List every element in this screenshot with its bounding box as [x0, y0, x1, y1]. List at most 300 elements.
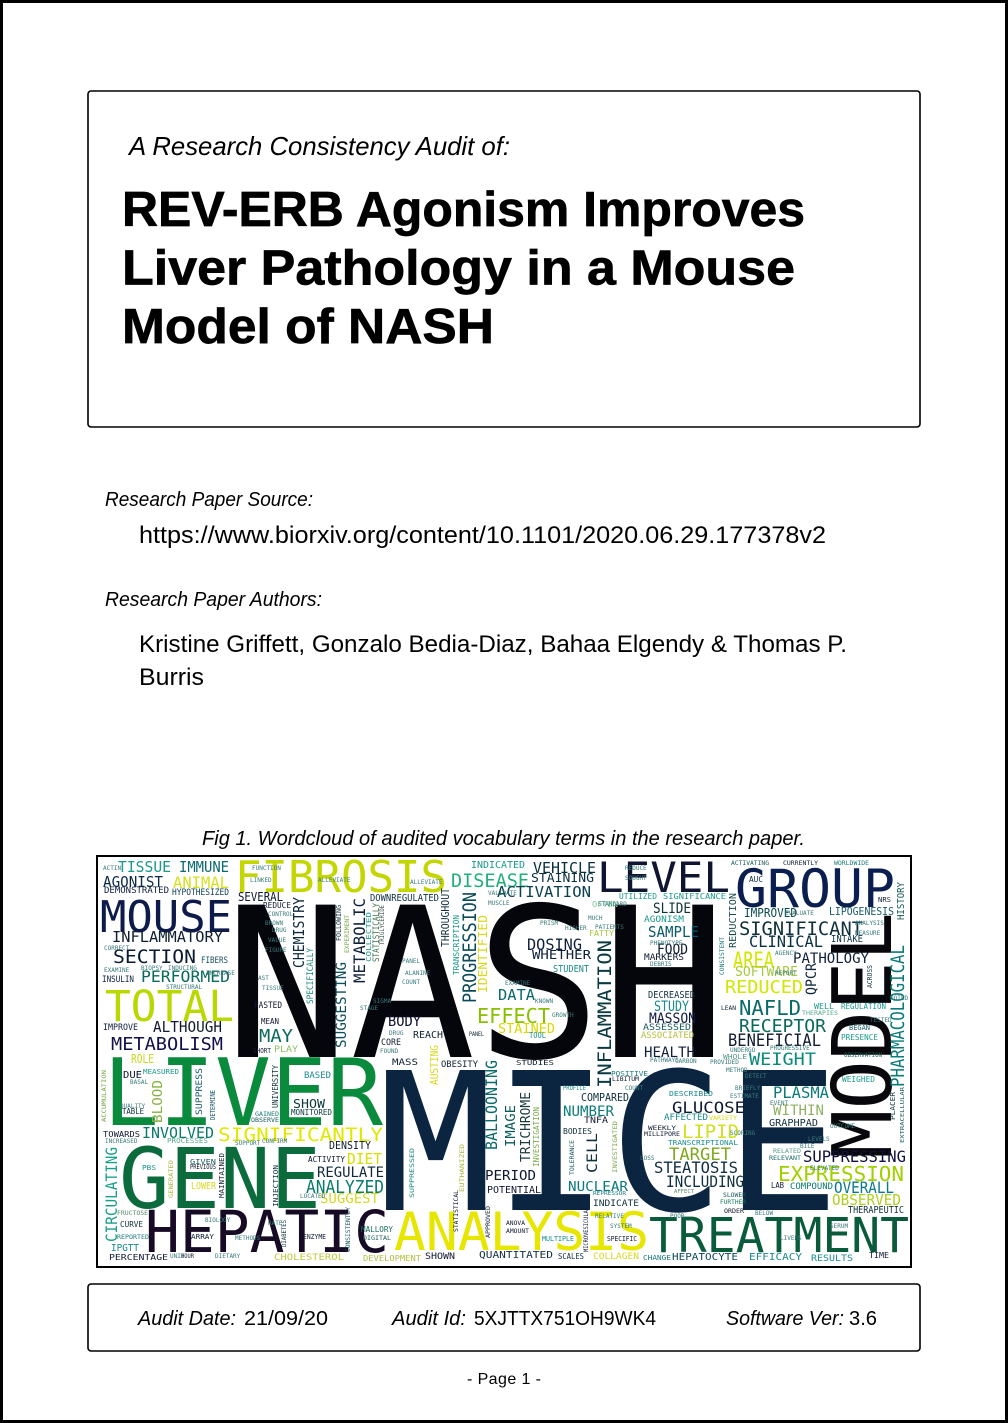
vertical words: PHARMACOLOGICAL	[887, 945, 909, 1087]
tiny filler words: REPORT	[775, 970, 797, 977]
word: MICE: MICE	[378, 1033, 840, 1256]
medium words: PERCENTAGE	[109, 1253, 168, 1262]
medium words: HEALTH	[644, 1045, 695, 1061]
tiny filler words: RATE	[268, 1220, 283, 1227]
medium words: REACH	[413, 1030, 443, 1041]
vertical words: MAINTAINED	[218, 1153, 226, 1198]
medium words: OFTEN	[592, 900, 618, 909]
medium words: WHETHER	[532, 948, 592, 962]
medium words: MARKERS	[644, 953, 684, 963]
vertical words: INVESTIGATION	[532, 1107, 541, 1167]
word: GROUP: GROUP	[735, 859, 895, 920]
medium words: SEVERAL	[238, 890, 283, 904]
tiny filler words: EVALUATE	[785, 910, 814, 917]
tiny filler words: LEVELS	[808, 1136, 830, 1143]
tiny filler words: METHOD	[726, 1067, 748, 1074]
tiny filler words: EXAMINE	[505, 980, 531, 987]
vertical words: UNIVERSITY	[271, 1065, 280, 1108]
medium words: ANIMAL	[173, 873, 229, 892]
tiny filler words: PATHWAYS	[650, 1057, 679, 1064]
word: FIBROSIS: FIBROSIS	[235, 852, 447, 903]
word: TOTAL: TOTAL	[105, 982, 234, 1032]
vertical words: ACCUMULATION	[101, 1070, 108, 1122]
medium words: SCALES	[558, 1252, 584, 1261]
medium words: PERFORMED	[141, 967, 230, 986]
medium words: SIGNIFICANTLY	[218, 1124, 384, 1146]
tiny filler words: BRIEFLY	[735, 1085, 761, 1092]
medium words: MASS	[392, 1058, 418, 1068]
medium words: OBSERVED	[832, 1191, 901, 1209]
medium words: THERAPEUTIC	[848, 1205, 904, 1216]
medium words: PLAY	[274, 1045, 299, 1055]
medium words: LIPOGENESIS	[829, 905, 894, 918]
tiny filler words: GROWTH	[552, 1012, 574, 1019]
tiny filler words: ALLEVIATE	[318, 877, 351, 884]
medium words: STEATOSIS	[654, 1158, 738, 1177]
tiny filler words: STANDARD	[598, 901, 627, 908]
medium words: COMPOUND	[790, 1182, 833, 1192]
word: NASH: NASH	[224, 864, 727, 1107]
vertical words: AUSTING	[428, 1045, 441, 1085]
tiny filler words: PRISM	[540, 920, 558, 927]
tiny filler words: MUSCLE	[488, 900, 510, 907]
title: REV-ERB Agonism Improves	[122, 183, 805, 237]
vertical words: STATISTICALLY	[372, 903, 382, 962]
medium words: LOWER	[191, 1181, 217, 1192]
subtitle: A Research Consistency Audit of:	[127, 131, 510, 161]
authors: Burris	[139, 664, 204, 691]
vertical words: INFLAMMATION	[594, 940, 616, 1088]
vertical words: ACROSS	[866, 965, 874, 988]
vertical words: CIRCULATING	[102, 1147, 121, 1242]
medium words: FOOD	[657, 942, 688, 958]
medium words: DEVELOPMENT	[363, 1254, 421, 1263]
medium words: DEMONSTRATED	[104, 886, 169, 896]
medium words: DECREASED	[648, 990, 695, 1001]
tiny filler words: CORRECT	[104, 945, 130, 952]
medium words: GRAPHPAD	[769, 1118, 818, 1129]
tiny filler words: PROGRESSIVE	[770, 1045, 810, 1052]
medium words: RECEPTOR	[739, 1016, 826, 1037]
medium words: DOWNREGULATED	[370, 893, 439, 904]
medium words: THERAPIES	[802, 1010, 838, 1017]
medium words: NRS	[878, 896, 891, 904]
medium words: BODIES	[563, 1127, 592, 1136]
medium words: STAINED	[498, 1022, 555, 1037]
medium words: REPRESSOR	[593, 1191, 627, 1197]
medium words: MULTIPLE	[542, 1235, 574, 1243]
tiny filler words: TISSUE	[262, 985, 284, 992]
tiny filler words: SCORING	[730, 1130, 756, 1137]
vertical words: COLLECTED	[365, 912, 373, 962]
medium words: EFFECT	[477, 1004, 550, 1028]
audit date	[137, 1308, 328, 1330]
medium words: TIME	[869, 1251, 889, 1260]
vertical words: DETERMINE	[209, 1090, 217, 1120]
medium words: TISSUE	[118, 858, 171, 876]
tiny filler words: FIGURE	[265, 947, 287, 954]
tiny filler words: SOUGHT	[625, 875, 647, 882]
medium words: STAINING	[531, 871, 594, 885]
medium words: IMMUNE	[179, 858, 229, 876]
medium words: BENEFICIAL	[728, 1031, 821, 1051]
word: TREATMENT: TREATMENT	[649, 1208, 909, 1264]
medium words	[102, 858, 906, 1264]
word: LIVER: LIVER	[103, 1039, 383, 1147]
medium words: INCLUDING	[666, 1172, 744, 1191]
medium words: MAY	[259, 1026, 293, 1047]
medium words: SUPPRESSING	[803, 1147, 906, 1166]
medium words: AUC	[749, 875, 763, 884]
medium words: DIET	[347, 1150, 382, 1168]
tiny filler words: MEASURE	[855, 930, 881, 937]
word: ANALYSIS: ANALYSIS	[394, 1202, 649, 1263]
medium words: GIVEN	[190, 1158, 216, 1166]
vertical words: IDENTIFIED	[476, 915, 490, 993]
medium words: SLIDE	[653, 901, 691, 917]
medium words: MILLIPORE	[644, 1131, 680, 1138]
tiny filler words: EXAMINE	[104, 967, 130, 974]
vertical words: SUPPRESS	[195, 1068, 205, 1115]
tiny filler words: ACTIN	[103, 865, 121, 872]
vertical words: APPROVED	[485, 1206, 492, 1238]
medium words: INSULIN	[102, 975, 134, 985]
medium words: CURRENTLY	[783, 860, 818, 867]
tiny filler words: LINKED	[250, 877, 272, 884]
medium words: ALTHOUGH	[153, 1018, 222, 1036]
vertical words: REDUCTION	[728, 893, 739, 948]
medium words: ROLE	[131, 1052, 154, 1066]
tiny filler words: KNOWN	[535, 998, 553, 1005]
tiny filler words: LIVERS	[780, 1235, 802, 1242]
medium words: DENSITY	[329, 1139, 371, 1152]
medium words: WORLDWIDE	[834, 860, 869, 867]
source label: Research Paper Source:	[105, 489, 313, 511]
tiny filler words: ALANINE	[405, 970, 431, 977]
medium words: PREVIOUS	[190, 1163, 216, 1171]
medium words: CLINICAL	[749, 932, 823, 951]
vertical words: QPCR	[804, 962, 820, 995]
medium words: SLOWER	[723, 1192, 746, 1199]
medium words: WEIGHT	[749, 1050, 816, 1070]
tiny filler words: METHODS	[235, 1235, 261, 1242]
medium words: INTAKE	[831, 934, 863, 945]
tiny filler words: RELATIVE	[595, 1213, 624, 1220]
medium words: AGONISM	[644, 915, 685, 925]
vertical words: MICROVESICULAR	[583, 1207, 590, 1252]
medium words: FRUCTOSE	[117, 1210, 148, 1217]
tiny filler words: BROWN	[265, 920, 283, 927]
tiny filler words: INDUCING	[168, 965, 197, 972]
audit id: Audit Id:	[391, 1308, 466, 1330]
authors: Kristine Griffett, Gonzalo Bedia-Diaz, Bahaa Elgendy & Thomas P.	[139, 631, 847, 658]
vertical words: INJECTION	[272, 1165, 280, 1207]
medium words: OBSERVE	[251, 1117, 279, 1124]
medium words: DISEASE	[451, 870, 529, 892]
medium words: ASSOCIATED	[641, 1031, 694, 1041]
vertical words: DIABETES	[281, 1220, 288, 1247]
tiny filler words: BILE	[800, 1143, 815, 1150]
medium words: GAINED	[255, 1111, 279, 1118]
medium words: IMPROVED	[744, 906, 797, 920]
medium words: STUDENT	[553, 964, 589, 975]
tiny filler words: OUTCOME	[830, 1123, 856, 1130]
vertical words: SPECIFICALLY	[306, 948, 316, 1004]
tiny filler words: BIOLOGY	[205, 1217, 231, 1224]
vertical words: CELL	[585, 1133, 601, 1173]
medium words: ASSESSED	[643, 1023, 691, 1033]
title	[122, 183, 805, 354]
medium words: LIBITUM	[612, 1076, 639, 1083]
vertical words: CONSISTENT	[719, 937, 726, 975]
medium words: REDUCE	[263, 901, 291, 910]
word: LEVEL: LEVEL	[597, 853, 730, 902]
tiny filler words: LOCATED	[300, 1193, 326, 1200]
tiny filler words: COUNT	[625, 1085, 643, 1092]
authors	[139, 631, 847, 691]
vertical words: PROGRESSION	[459, 892, 481, 1003]
medium words: TRANSCRIPTIONAL	[668, 1139, 738, 1147]
tiny filler words: ESTIMATE	[730, 1093, 759, 1100]
tiny filler words: INCREASE	[206, 970, 235, 977]
medium words: PBS	[142, 1164, 156, 1172]
medium words: TABLE	[122, 1107, 144, 1116]
medium words: BASED	[304, 1071, 331, 1081]
word: HEPATIC: HEPATIC	[145, 1198, 389, 1266]
medium words: NUMBER	[563, 1104, 615, 1120]
medium words: PROFILE	[563, 1085, 586, 1092]
panel: title box	[88, 91, 920, 427]
tiny filler words: DEBRIS	[650, 961, 672, 968]
tiny filler words: AST	[258, 975, 269, 982]
medium words: ANOVA	[506, 1220, 525, 1227]
vertical words: BLOOD	[151, 1080, 166, 1123]
vertical words: TRANSCRIPTION	[452, 915, 461, 975]
audit date: Audit Date:	[137, 1308, 236, 1330]
medium words: TOWARDS	[103, 1130, 140, 1139]
software version: Software Ver:	[726, 1308, 844, 1330]
software version: 3.6	[849, 1308, 877, 1330]
medium words: STUDY	[654, 999, 689, 1015]
medium words: ARRAY	[191, 1233, 215, 1241]
tiny filler words: BIOPSY	[141, 965, 163, 972]
medium words: GLUCOSE	[672, 1098, 745, 1117]
tiny filler words: BASAL	[130, 1079, 148, 1086]
tiny filler words: UNDERGO	[730, 1047, 756, 1054]
medium words: OVERALL	[834, 1178, 894, 1197]
panel: audit footer	[88, 1284, 920, 1351]
tiny filler words: MUCH	[588, 915, 603, 922]
medium words: INFLAMMATORY	[112, 928, 223, 946]
vertical words: SUGGESTING	[334, 962, 350, 1048]
medium words: LEAN	[721, 1005, 736, 1012]
medium words: FIBERS	[201, 956, 228, 966]
vertical words: CHEMISTRY	[290, 897, 308, 968]
medium words: HEPATOCYTE	[672, 1252, 738, 1263]
medium words: BODY	[388, 1014, 422, 1030]
tiny filler words: CONFIRM	[262, 1138, 288, 1145]
medium words: FURTHER	[720, 1199, 746, 1206]
tiny filler words: DRUG	[272, 927, 287, 934]
tiny filler words: FOUND	[380, 1048, 398, 1055]
tiny filler words: TESTED	[870, 1017, 892, 1024]
tiny filler words: SIGMA	[373, 998, 391, 1005]
medium words: BEGAN	[849, 1024, 870, 1032]
medium words: SIGNIFICANCE	[663, 892, 726, 901]
word: MODEL: MODEL	[816, 912, 911, 1159]
medium words: RESULTS	[811, 1254, 853, 1264]
medium words: RELEVANT	[769, 1155, 801, 1162]
medium words: SAMPLE	[648, 923, 699, 941]
medium words: TNFA	[584, 1116, 609, 1126]
vertical words: INVESTIGATED	[612, 1121, 619, 1173]
medium words: ENZYME	[303, 1233, 326, 1241]
medium words: REDUCED	[725, 977, 803, 998]
medium words: SIGNIFICANT	[739, 918, 863, 940]
tiny filler words: PROVIDED	[710, 1059, 739, 1066]
tiny filler words: SERUM	[830, 1223, 848, 1230]
medium words: NUCLEAR	[568, 1180, 628, 1195]
medium words: DATA	[498, 986, 535, 1004]
medium words: COLLAGEN	[593, 1252, 639, 1262]
medium words: AFFECT	[674, 1189, 694, 1195]
medium words: SHORT	[253, 1047, 272, 1055]
tiny filler words	[103, 865, 908, 1260]
vertical words: HISTORY	[896, 882, 907, 920]
tiny filler words: SYSTEM	[610, 1223, 632, 1230]
medium words: PERIOD	[485, 1169, 536, 1184]
tiny filler words: PATIENTS	[595, 924, 624, 931]
audit id	[391, 1308, 656, 1330]
medium words: REGULATE	[317, 1165, 384, 1181]
tiny filler words: ANALYSIS	[855, 920, 884, 927]
medium words: EFFICACY	[749, 1252, 802, 1263]
medium words: MEAN	[261, 1017, 279, 1026]
medium words: DUE	[123, 1070, 142, 1081]
tiny filler words: DIETARY	[215, 1253, 241, 1260]
medium words: WHOLE	[723, 1053, 747, 1061]
medium words: CURVE	[120, 1220, 143, 1229]
medium words: ACTIVITY	[308, 1155, 345, 1164]
medium words: VARIETY	[709, 1115, 737, 1122]
medium words: LAB	[771, 1181, 784, 1190]
medium words: INDICATED	[471, 860, 525, 871]
vertical words: EXPERIMENT	[344, 915, 351, 953]
medium words: POSITIVE	[611, 1070, 648, 1078]
tiny filler words: DETECT	[745, 1073, 767, 1080]
tiny filler words: UNIT	[170, 1253, 185, 1260]
medium words: REPORTED	[117, 1234, 149, 1241]
vertical words: TRICHROME	[519, 1092, 534, 1162]
tiny filler words: STRUCTURAL	[166, 984, 203, 991]
source url: https://www.biorxiv.org/content/10.1101/2020.06.29.177378v2	[139, 522, 826, 549]
audit date: 21/09/20	[244, 1308, 328, 1330]
figure caption: Fig 1. Wordcloud of audited vocabulary terms in the research paper.	[202, 828, 805, 850]
medium words: INVOLVED	[142, 1124, 214, 1142]
tiny filler words: COUNT	[402, 979, 420, 986]
medium words: ACTIVATION	[497, 883, 591, 901]
medium words: PRESENCE	[841, 1033, 878, 1042]
vertical words: PLACER	[889, 1091, 897, 1120]
tiny filler words: VALIDATE	[488, 890, 517, 897]
medium words: OBSERVATION	[844, 1052, 882, 1059]
tiny filler words: EVENT	[770, 1100, 788, 1107]
tiny filler words: STAGE	[360, 1005, 378, 1012]
medium words: MEASURED	[143, 1068, 179, 1076]
medium words: CHANGE	[643, 1254, 671, 1262]
medium words: UTILIZED	[619, 892, 657, 901]
audit id: 5XJTTX751OH9WK4	[474, 1308, 656, 1330]
tiny filler words: SUPPORT	[235, 1140, 261, 1147]
tiny filler words: HIGHER	[565, 925, 587, 932]
vertical words: TOLERANCE	[569, 1140, 576, 1175]
medium words: AGONIST	[103, 873, 163, 891]
tiny filler words: FUNCTION	[252, 865, 281, 872]
medium words: ANALYZED	[306, 1177, 384, 1198]
vertical words: TRIGLYCERIDE	[379, 905, 386, 945]
vertical words: GENERATED	[168, 1160, 175, 1198]
medium words: COMPARED	[581, 1091, 629, 1104]
tiny filler words: POOR	[670, 1213, 685, 1220]
medium words: CORE	[381, 1038, 401, 1048]
vertical words: THROUGHOUT	[439, 888, 452, 947]
word: MOUSE: MOUSE	[100, 892, 232, 943]
medium words: AMOUNT	[506, 1228, 529, 1235]
vertical words: BALLOONING	[482, 1060, 501, 1150]
medium words: WELL	[814, 1002, 834, 1011]
tiny filler words: PANEL	[402, 958, 420, 965]
vertical words: SUPPRESSED	[409, 1147, 416, 1198]
title: Model of NASH	[122, 300, 494, 354]
medium words: AREA	[733, 949, 774, 974]
vertical words: CONSISTENTLY	[345, 1207, 352, 1252]
medium words: SUGGEST	[320, 1192, 379, 1207]
medium words: CHOLESTEROL	[274, 1253, 344, 1263]
vertical words: METABOLIC	[350, 898, 369, 983]
tiny filler words: AGENCY	[775, 950, 797, 957]
medium words: PLASMA	[773, 1083, 829, 1102]
medium words: EXPRESSION	[778, 1162, 904, 1186]
medium words: FATTY	[589, 929, 614, 938]
medium words: REGULATION	[841, 1002, 886, 1011]
medium words: DESCRIBED	[669, 1090, 713, 1098]
medium words: INDICATE	[593, 1199, 639, 1209]
medium words: METABOLISM	[111, 1034, 223, 1055]
tiny filler words: REDUCE	[625, 865, 647, 872]
medium words: PROCESSES	[167, 1137, 208, 1145]
medium words: WEEKLY	[648, 1125, 676, 1132]
medium words: DIGITAL	[363, 1235, 391, 1242]
vertical words: STATISTICAL	[453, 1190, 460, 1232]
word cloud	[97, 852, 911, 1267]
medium words: PANEL	[469, 1031, 484, 1038]
medium words: MASSON	[649, 1011, 696, 1027]
medium words: IPGTT	[111, 1243, 139, 1254]
tiny filler words: ALLEVIATE	[410, 879, 443, 886]
tiny filler words: BELOW	[755, 1210, 773, 1217]
vertical words: EUTHANIZED	[459, 1143, 466, 1192]
tiny filler words: VALUE	[268, 937, 286, 944]
tiny filler words: QUALITY	[120, 1103, 146, 1110]
medium words: POTENTIAL	[487, 1185, 541, 1196]
page number: - Page 1 -	[467, 1371, 541, 1388]
medium words: IMPROVE	[103, 1023, 138, 1033]
medium words: ACTIVATING	[731, 860, 769, 867]
medium words: PATHOLOGY	[793, 951, 870, 967]
medium words: SHOWN	[425, 1252, 455, 1262]
medium words: SOFTWARE	[735, 965, 798, 980]
medium words: HYPOTHESIZED	[172, 888, 229, 898]
